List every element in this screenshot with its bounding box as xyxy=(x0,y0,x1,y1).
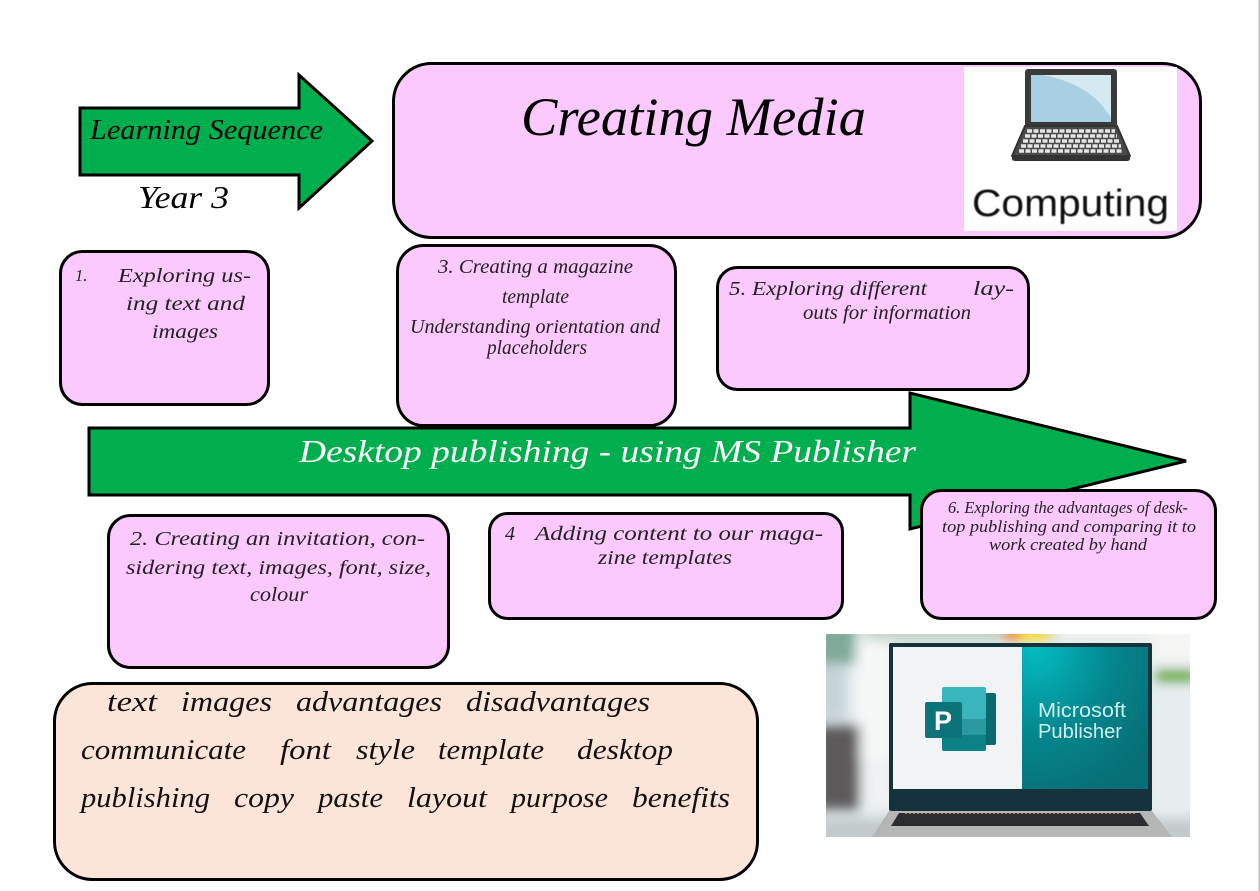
arrow: learning sequence xyxy=(80,75,372,208)
panel: vocabulary: benefits xyxy=(632,782,730,814)
panel: step 1: Exploring us- xyxy=(117,265,251,287)
panel: vocabulary: font xyxy=(280,734,332,766)
panel: step 1: ing text and xyxy=(126,293,246,315)
panel: vocabulary: style xyxy=(356,734,415,766)
panel: step 2: sidering text, images, font, size, xyxy=(126,557,431,579)
image: laptop showing Microsoft Publisher: Publisher xyxy=(1038,721,1122,743)
image: laptop showing Microsoft Publisher xyxy=(826,634,1190,837)
keyboard xyxy=(872,811,1172,837)
panel: step 2 xyxy=(108,516,448,668)
panel: vocabulary: paste xyxy=(316,782,383,814)
panel: step 2: colour xyxy=(250,584,308,606)
panel: step 6: work created by hand xyxy=(989,535,1148,554)
panel: vocabulary: template xyxy=(438,734,544,766)
panel: vocabulary: copy xyxy=(234,782,294,814)
icon label: Computing xyxy=(972,183,1169,225)
panel: step 3: placeholders xyxy=(485,337,587,359)
panel: step 6: 6. Exploring the advantages of desk- xyxy=(948,498,1188,517)
panel: step 1: images xyxy=(152,321,218,343)
panel: vocabulary: publishing xyxy=(79,782,210,814)
panel: vocabulary: desktop xyxy=(577,734,673,766)
panel: step 4: Adding content to our maga- xyxy=(533,523,823,545)
title: Creating Media xyxy=(521,87,866,147)
panel: step 6 xyxy=(922,490,1216,618)
panel: step 3 xyxy=(398,246,676,426)
arrow label: Desktop publishing - using MS Publisher xyxy=(298,433,917,469)
publisher label: Microsoft xyxy=(1038,700,1126,722)
panel: step 2: 2. Creating an invitation, con- xyxy=(130,528,425,550)
panel: vocabulary: communicate xyxy=(81,734,246,766)
page edge line xyxy=(1258,0,1260,891)
panel: step 3: template xyxy=(502,286,569,308)
panel: vocabulary: advantages xyxy=(296,686,442,718)
panel: step 4: zine templates xyxy=(597,547,732,569)
panel: step 1 xyxy=(60,252,268,404)
panel: step 5: 5. Exploring different xyxy=(729,278,928,300)
panel: step 3: Understanding orientation and xyxy=(410,316,661,338)
panel: vocabulary: images xyxy=(181,686,272,718)
panel: step 4: 4 xyxy=(505,523,515,545)
panel: vocabulary: purpose xyxy=(509,782,608,814)
panel: step 1: 1. xyxy=(75,266,87,285)
text: year 3: Year 3 xyxy=(138,179,229,215)
panel: step 5: outs for information xyxy=(803,302,971,324)
laptop screen xyxy=(889,643,1152,811)
heading: learning sequence: Learning Sequence xyxy=(89,115,323,146)
arrow: desktop publishing xyxy=(89,393,1186,529)
panel: vocabulary: disadvantages xyxy=(466,686,650,718)
publisher logo: P xyxy=(934,706,952,736)
panel: step 6: top publishing and comparing it to xyxy=(942,517,1196,536)
panel: step 4 xyxy=(490,514,842,618)
icon: computing laptop xyxy=(964,67,1177,231)
panel: vocabulary: layout xyxy=(407,782,488,814)
publisher logo xyxy=(925,687,996,751)
panel: title xyxy=(394,64,1200,238)
panel: step 5 xyxy=(718,268,1028,390)
panel: vocabulary xyxy=(54,684,758,880)
panel: step 5: lay- xyxy=(973,278,1014,300)
panel: step 3: 3. Creating a magazine xyxy=(437,256,633,278)
panel: vocabulary: text xyxy=(107,686,158,718)
